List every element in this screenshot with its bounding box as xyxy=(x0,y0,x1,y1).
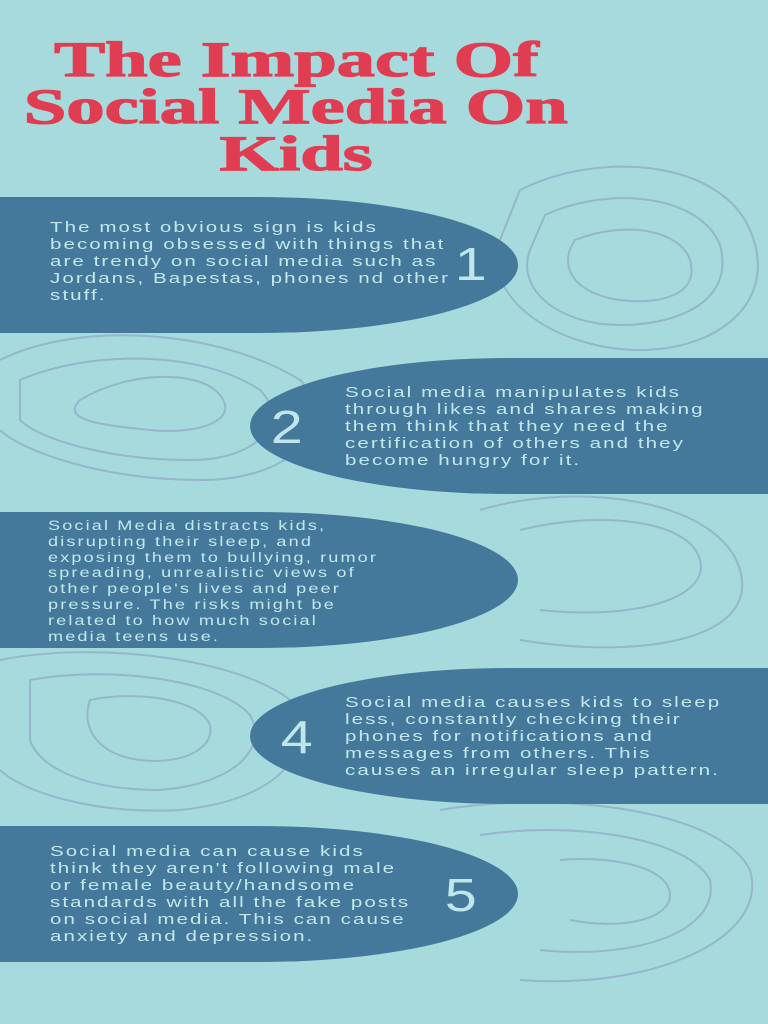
text: 3: pressure. The risks might be xyxy=(48,597,336,612)
text: 3: other people's lives and peer xyxy=(48,581,341,596)
text: 4 xyxy=(345,694,721,779)
text: 3: Social Media distracts kids, xyxy=(48,518,326,533)
text: 5: or female beauty/handsome xyxy=(50,877,356,894)
text: 4: messages from others. This xyxy=(345,745,652,762)
text: 5: anxiety and depression. xyxy=(50,928,314,945)
text: 5: Social media can cause kids xyxy=(50,843,365,860)
text: 5: on social media. This can cause xyxy=(50,911,406,928)
text: 1: stuff. xyxy=(50,287,107,304)
text: 2 xyxy=(345,384,705,469)
title: Kids xyxy=(219,125,373,181)
text: 3: media teens use. xyxy=(48,629,220,644)
text: 5 xyxy=(50,843,410,945)
text: 4: less, constantly checking their xyxy=(345,711,682,728)
panel: 1 xyxy=(0,197,518,333)
text: 4: phones for notifications and xyxy=(345,728,654,745)
text: 2: certification of others and they xyxy=(345,435,685,452)
text: 1: The most obvious sign is kids xyxy=(50,219,378,236)
text: 2: through likes and shares making xyxy=(345,401,705,418)
text: 1: Jordans, Bapestas, phones nd other xyxy=(50,270,450,287)
text: 3: related to how much social xyxy=(48,613,318,628)
text: 3 xyxy=(48,518,378,644)
panel: 2 xyxy=(250,358,768,494)
text: 1 xyxy=(50,219,450,304)
text: 3: disrupting their sleep, and xyxy=(48,534,313,549)
panel: 3 xyxy=(0,512,518,648)
text: 4: Social media causes kids to sleep xyxy=(345,694,721,711)
text: 4: causes an irregular sleep pattern. xyxy=(345,762,720,779)
text: 2: them think that they need the xyxy=(345,418,670,435)
title: Social Media On xyxy=(24,78,568,134)
text: 3: exposing them to bullying, rumor xyxy=(48,550,378,565)
panel: 5 xyxy=(0,826,518,962)
number 1: 1 xyxy=(455,238,487,290)
text: 1: becoming obsessed with things that xyxy=(50,236,445,253)
title xyxy=(24,31,568,181)
text: 5: standards with all the fake posts xyxy=(50,894,410,911)
panel: 4 xyxy=(250,668,768,804)
number 4: 4 xyxy=(281,711,313,763)
text: 3: spreading, unrealistic views of xyxy=(48,565,356,580)
title: The Impact Of xyxy=(54,31,538,87)
text: 2: Social media manipulates kids xyxy=(345,384,681,401)
text: 2: become hungry for it. xyxy=(345,452,581,469)
number 2: 2 xyxy=(271,401,303,453)
number 5: 5 xyxy=(445,869,477,921)
text: 5: think they aren't following male xyxy=(50,860,396,877)
text: 1: are trendy on social media such as xyxy=(50,253,437,270)
